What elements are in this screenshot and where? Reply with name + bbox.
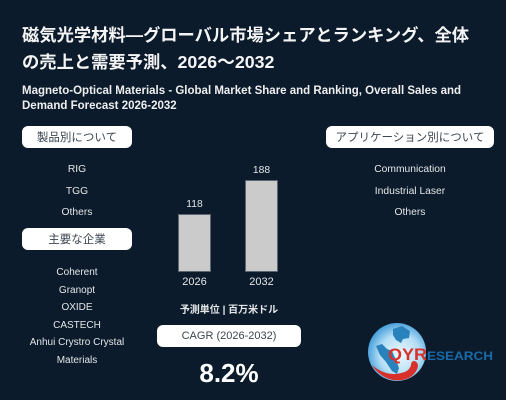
list: applications: Industrial Laser [375,186,445,197]
list: companies: Materials [57,354,97,366]
heading: by product: 製品別について [37,132,117,144]
heading: by product [22,126,132,148]
list: companies: Anhui Crystro Crystal [30,337,124,348]
logo: QYResearch [368,323,493,381]
bar 2026 [178,214,211,272]
list: products [62,164,92,218]
list: applications: Others [395,207,425,218]
list: companies [30,267,124,366]
CAGR value: 8.2% [199,358,259,388]
list: products: RIG [68,164,86,175]
bar 2032 [245,180,278,272]
subtitle [22,85,461,112]
subtitle: Demand Forecast 2026-2032 [22,100,177,112]
list: companies: Granopt [59,284,95,296]
title: 磁気光学材料―グローバル市場シェアとランキング、全体 [22,25,469,45]
value label 2032: 188 [253,165,270,176]
list: companies: Coherent [56,267,98,278]
year label 2026: 2026 [182,276,207,288]
heading: key companies: 主要な企業 [48,234,106,246]
unit label: 予測単位 | 百万米ドル [180,305,278,316]
CAGR label [157,325,301,347]
bar chart [178,165,278,288]
title: の売上と需要予測、2026～2032 [22,52,274,72]
CAGR label: CAGR (2026-2032) [182,330,276,342]
year label 2032: 2032 [249,276,274,288]
list: applications: Communication [374,164,446,175]
heading: by application [326,126,494,148]
list: applications [374,164,446,218]
heading: key companies [22,228,132,250]
subtitle: Magneto-Optical Materials - Global Market Share and Ranking, Overall Sales and [22,85,461,97]
list: products: TGG [66,186,88,197]
list: companies: CASTECH [53,320,101,330]
logo: QYResearch: ESEARCH [427,351,493,363]
logo: QYResearch: QYR [388,345,427,364]
value label 2026: 118 [186,199,203,210]
list: products: Others [62,207,92,218]
heading: by application: アプリケーション別について [336,132,484,144]
title [22,25,469,72]
list: companies: OXIDE [61,302,93,313]
